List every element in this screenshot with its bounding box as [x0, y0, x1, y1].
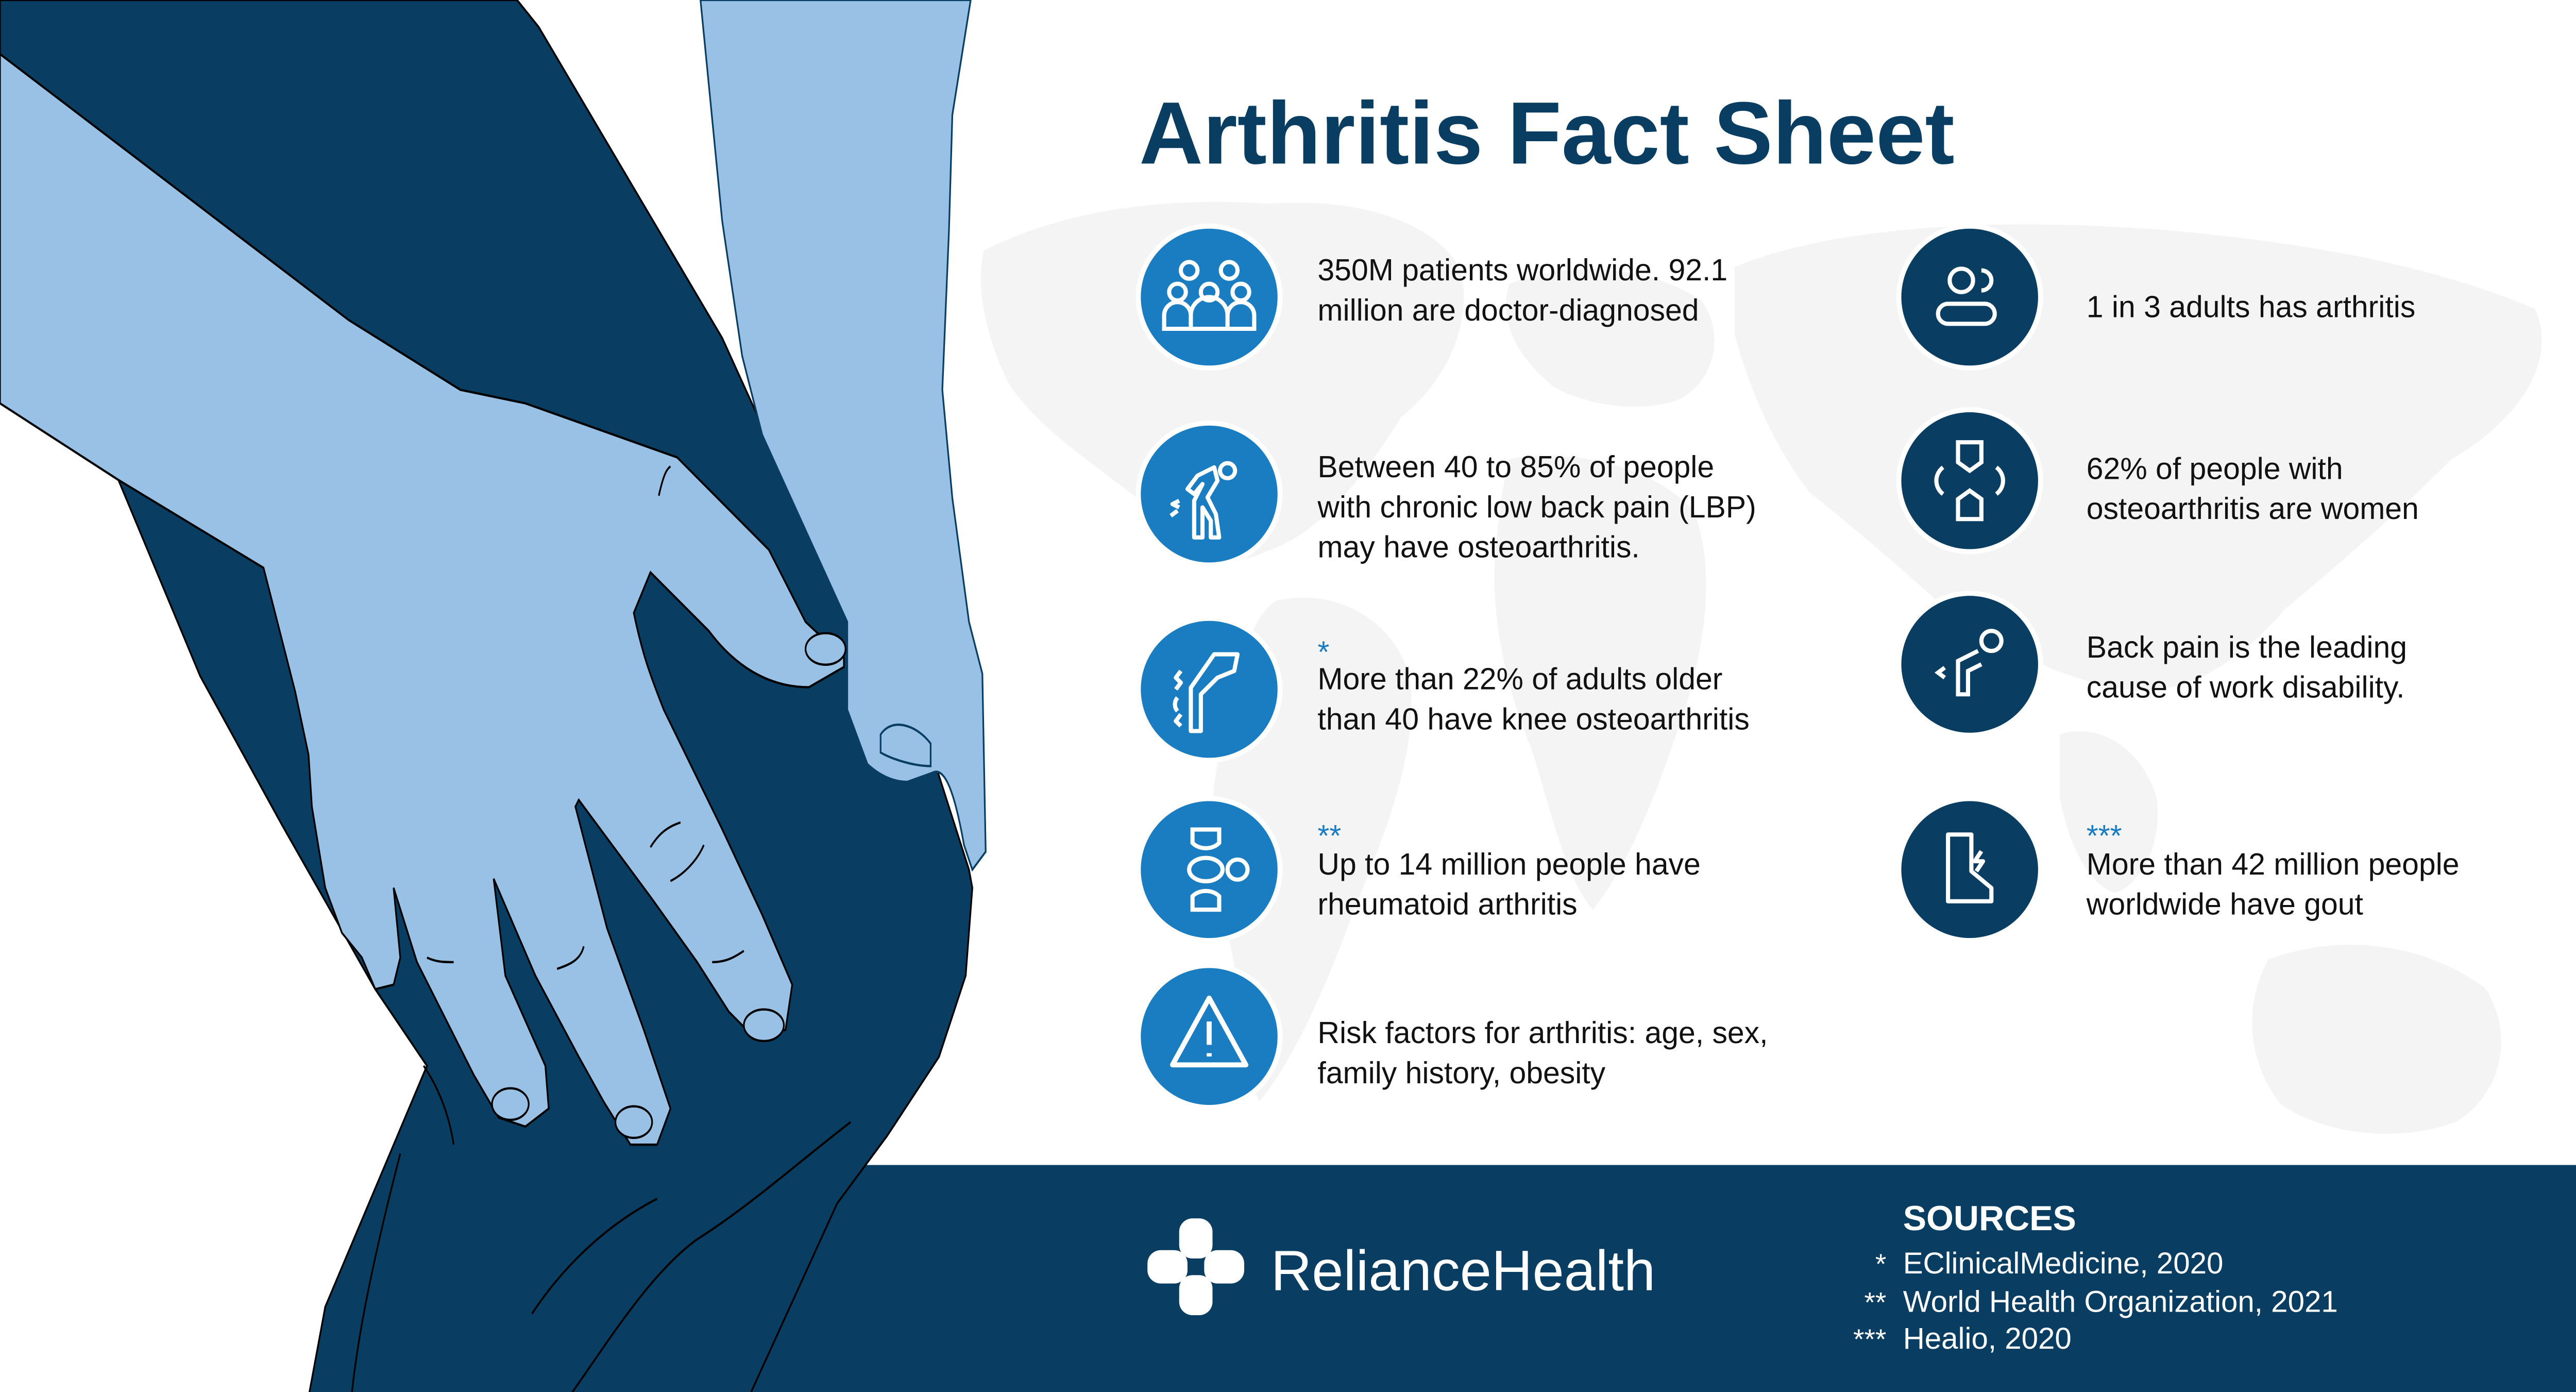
text: patients worldwide: million are doctor-diagnosed — [1317, 294, 1699, 327]
text: low back pain: Between 40 to 85% of people — [1317, 450, 1714, 484]
text: knee osteoarthritis: * — [1317, 636, 1329, 669]
footer banner — [500, 1165, 2576, 1392]
illustration: leg and hands — [0, 0, 986, 1392]
right column facts — [1896, 224, 2460, 943]
left column facts — [1136, 224, 1768, 1110]
icon: cross — [1147, 1218, 1244, 1315]
upper hand nail — [880, 725, 930, 766]
text: low back pain: may have osteoarthritis. — [1317, 531, 1640, 564]
sources: *** — [1853, 1323, 1886, 1355]
icon: back pain — [1896, 591, 2043, 737]
text: risk factors: family history, obesity — [1317, 1056, 1606, 1090]
text: gout: worldwide have gout — [2086, 888, 2363, 921]
text: knee osteoarthritis: than 40 have knee osteoarthritis — [1317, 702, 1750, 736]
icon: warning — [1136, 963, 1282, 1110]
lower hand — [0, 54, 844, 1145]
background world map — [981, 202, 2541, 1134]
leg crease lines — [352, 1066, 851, 1392]
text: rheumatoid arthritis: rheumatoid arthritis — [1317, 888, 1578, 921]
knuckle lines — [427, 466, 845, 1138]
icon: back pain — [1136, 421, 1282, 567]
icon: knee pain — [1136, 616, 1282, 763]
brand name: RelianceHealth — [1271, 1239, 1655, 1302]
sources: SOURCES — [1903, 1199, 2076, 1238]
sources: World Health Organization, 2021 — [1903, 1285, 2338, 1319]
text: women: 62% of people with — [2087, 452, 2343, 485]
text: rheumatoid arthritis: Up to 14 million people have — [1317, 848, 1701, 881]
title: Arthritis Fact Sheet — [1139, 84, 1955, 182]
text: risk factors: Risk factors for arthritis: age, sex, — [1317, 1016, 1768, 1050]
text: knee osteoarthritis: More than 22% of adults older — [1317, 663, 1722, 696]
text: gout: *** — [2087, 819, 2122, 853]
icon: adults — [1896, 224, 2043, 371]
icon: joint — [1136, 796, 1282, 943]
text: work disability: Back pain is the leading — [2087, 631, 2407, 664]
text: gout: More than 42 million people — [2087, 848, 2460, 881]
sources: ** — [1864, 1286, 1886, 1318]
text: patients worldwide: 350M patients worldwide. 92.1 — [1317, 254, 1727, 287]
sources: * — [1875, 1248, 1886, 1280]
logo — [1147, 1218, 1655, 1315]
text: work disability: cause of work disability. — [2087, 671, 2405, 705]
sources — [1853, 1199, 2338, 1355]
upper hand — [701, 0, 986, 870]
text: rheumatoid arthritis: ** — [1317, 819, 1341, 853]
sources: EClinicalMedicine, 2020 — [1903, 1247, 2223, 1280]
text: low back pain: with chronic low back pain (LBP) — [1317, 491, 1756, 524]
sources: Healio, 2020 — [1903, 1322, 2072, 1355]
text: women: osteoarthritis are women — [2087, 492, 2419, 526]
icon: knee joint — [1896, 407, 2043, 554]
leg — [0, 0, 972, 1392]
text: 1 in 3 adults: 1 in 3 adults has arthritis — [2087, 290, 2415, 324]
icon: gout foot — [1896, 796, 2043, 943]
icon: people group — [1136, 224, 1282, 371]
